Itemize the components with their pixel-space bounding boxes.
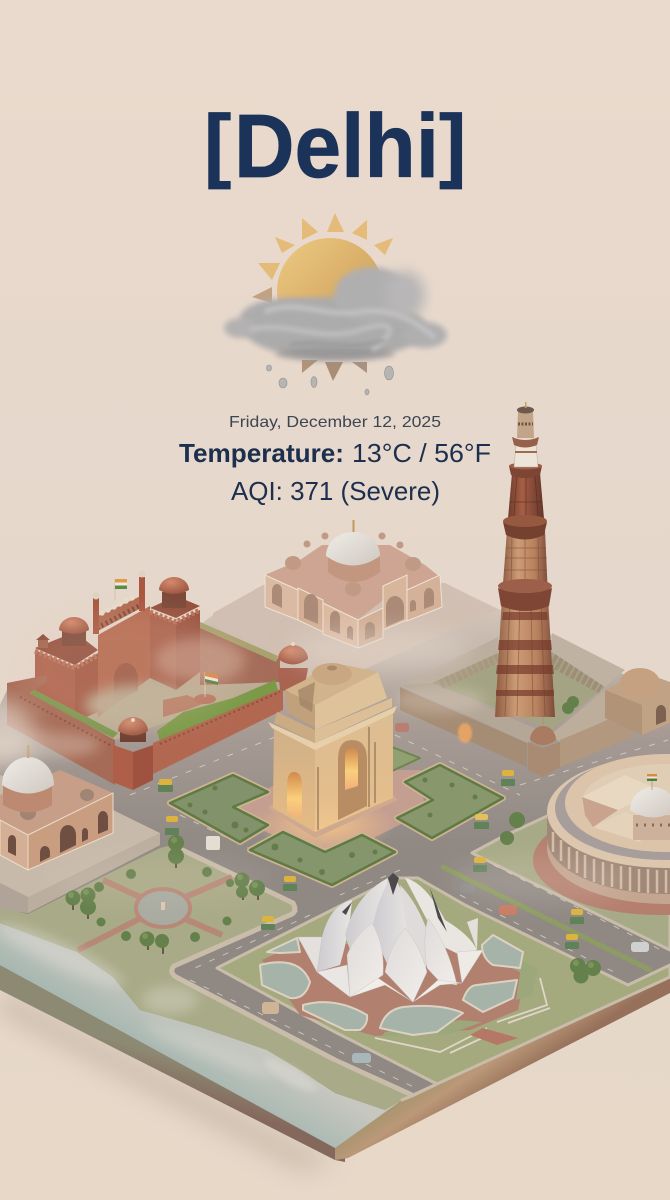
attic left [285,690,315,728]
battlements [20,692,280,745]
attic right [315,672,387,730]
small domes [285,532,421,596]
front left wall [7,683,115,785]
roof terrace [0,770,113,835]
third balcony rim [509,462,542,470]
India Gate [268,663,398,838]
left arch [287,772,302,820]
left bastion [35,617,98,722]
platform [213,583,497,680]
outer ring [547,756,670,868]
right domed building [605,668,670,735]
third balcony [509,466,542,478]
drum [3,785,52,812]
right wing face [407,575,442,621]
park curb [172,845,412,1095]
lotus plaza [262,942,525,1036]
central gallery [96,595,150,717]
right face [28,793,113,870]
front corner tower [113,717,153,790]
garden L west [170,775,268,842]
lower bands [496,612,554,696]
right end tower [278,642,308,692]
cornice right [315,706,397,750]
back grass strip [200,622,278,662]
wall top front right [550,690,632,742]
petals back [317,875,478,975]
left grass strip [27,690,118,738]
dome [630,787,670,818]
front right wall [153,688,283,774]
title: ] [439,99,466,190]
dome drum [633,815,670,840]
trees [66,696,601,984]
left face [0,820,28,870]
red steps [470,1028,518,1045]
Parliament House [533,754,670,915]
courtyard floor [30,627,280,740]
first balcony rim [498,579,552,593]
drum [328,555,380,582]
top cap [517,406,534,414]
board ground and roads [0,570,670,1148]
plaza paving [235,770,425,860]
flag platform [163,695,205,717]
flag on gate [115,579,127,600]
second balcony [503,522,547,540]
Lotus Temple [260,873,550,1053]
wall glow [458,723,472,743]
second balcony rim [503,515,547,527]
white marble storey [514,445,538,467]
sun rays [252,213,393,381]
wall top back left [402,637,498,685]
Humayun's tomb, back [213,520,497,680]
top cupola [517,410,534,438]
right arch block [383,575,407,630]
finial [525,402,526,408]
left wing face [265,575,298,620]
title: Delhi [234,97,439,197]
fog over the upper city [0,610,485,770]
parliament lawn [472,810,670,950]
park paths and fountain [78,877,232,950]
dome [312,663,352,685]
corner domed tomb [528,717,560,777]
marble band [515,451,537,453]
city diorama board [0,570,670,1162]
dark ring [555,756,670,860]
cornice left [268,722,315,750]
lower flutes [505,600,545,716]
wall top back right [552,633,625,687]
parapet flag [194,672,218,704]
haze cloud [224,267,447,361]
Humayun's tomb, front [0,745,160,913]
Qutb Minar [495,402,555,717]
platform [0,775,160,913]
third storey flutes [510,475,542,528]
colonnade wall [547,812,670,894]
attic roof [285,665,378,705]
board side right [335,977,670,1160]
sun disc [277,238,383,344]
upper body right [315,698,392,743]
road lane markings [130,735,668,1090]
lotus temple lawn [217,878,670,1100]
flag [647,774,657,790]
title: [ [204,99,231,190]
roof block [582,775,660,810]
arches [8,811,108,862]
left end bastion [7,675,47,712]
garden L south [250,832,395,885]
main dome [2,757,54,794]
inner wall [582,797,618,827]
garden L east [397,765,503,838]
wall top front left [402,683,550,743]
drum windows [636,824,670,826]
river mist [0,915,320,1097]
top balcony [512,437,539,448]
inner left face [298,588,323,632]
column lines [318,727,375,830]
upper body left [274,712,315,743]
right outer wall [560,710,632,767]
petals front [298,918,483,1002]
second storey [502,530,548,597]
board side left [0,965,345,1162]
left outer wall [400,687,527,767]
India Gate plaza [170,747,503,885]
arches [272,584,434,640]
main dome [326,532,380,566]
finial [352,520,354,532]
columns [553,832,666,893]
auto rickshaws [158,770,584,949]
garden north [392,747,420,771]
plinth [268,795,398,838]
terrace lines [375,978,550,1053]
platform front edge [0,883,28,913]
roof terrace [265,545,440,620]
courtyard [432,652,605,730]
right arch [338,740,367,820]
garden curbs [170,765,503,885]
red base [533,805,670,915]
back inner wall [200,625,280,685]
lower storey [495,597,555,717]
inner ring [565,754,670,852]
small domes [20,806,36,820]
inner right wall arcade [552,660,602,687]
second storey bands [504,532,547,596]
third storey [507,473,545,530]
temperature: Temperature: [179,438,344,468]
right grass strip [157,680,278,742]
finial [27,745,30,758]
plaza glow [255,795,395,855]
interior [582,764,670,840]
road median [443,867,650,970]
platform right edge [28,833,160,913]
dark petal gaps [342,873,447,932]
vehicles [158,723,649,1063]
Red Fort [7,570,308,790]
icon: sun behind haze cloud with rain drops [224,213,447,395]
AQI: AQI: 371 (Severe) [231,476,440,506]
Qutb complex walls [400,633,670,777]
garden shrubs [188,778,478,875]
minarets [92,570,146,634]
temperature value: 13°C / 56°F [352,438,491,468]
terrace lawns [382,960,538,1036]
haze over landscape [0,731,630,904]
cupola windows [518,422,533,426]
dome oculus [327,666,337,670]
roof block south [593,812,650,842]
board shadow [0,988,350,1172]
lotus ponds [260,935,523,1035]
cars [206,723,649,1063]
rain drops [266,365,394,395]
front right face [358,608,383,648]
left face [273,725,315,832]
fog at gate [155,638,245,682]
plinth [547,838,670,904]
inner back wall arcade [440,655,498,683]
date: Friday, December 12, 2025 [229,414,441,431]
courtyard fog [85,685,195,725]
front left face [323,603,358,648]
stepped shadow [298,682,315,712]
right bastion [150,577,200,690]
first balcony [498,588,552,611]
right face [315,709,393,832]
right arch light [345,748,358,790]
river [0,923,402,1148]
park lawn [0,845,412,1110]
